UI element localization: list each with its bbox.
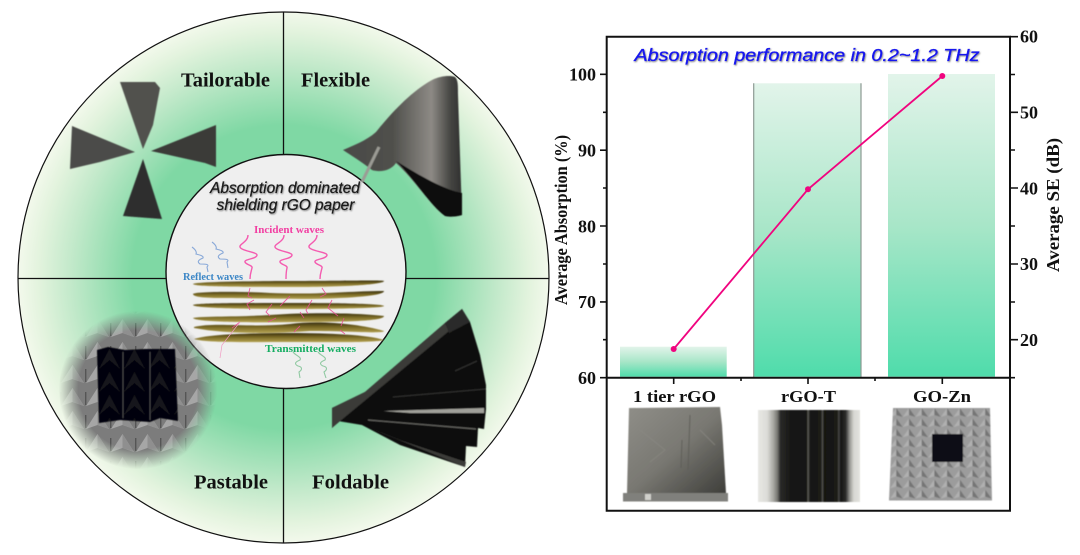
label: transmitted waves: Transmitted waves [265, 344, 356, 355]
right axis tick labels: 20 [1020, 330, 1038, 350]
right axis tick labels: 60 [1020, 26, 1038, 46]
label: incident waves: Incident waves [254, 225, 324, 236]
right axis tick labels: 50 [1020, 102, 1038, 122]
bar: rGO-T [754, 83, 861, 377]
heading: Pastable: Pastable [194, 472, 268, 494]
internal reflections inside layers [232, 288, 345, 334]
heading: Tailorable: Tailorable [181, 70, 270, 92]
icon: flexible curled paper [343, 76, 462, 217]
bar: GO-Zn [888, 74, 995, 377]
left axis tick labels: 100 [569, 64, 596, 84]
chart title: Absorption performance in 0.2~1.2 THz [633, 45, 980, 65]
left axis tick labels: 90 [578, 140, 596, 160]
left axis tick labels [569, 64, 596, 388]
photo: 1 tier rGO sheet [623, 407, 728, 502]
icon: tailored cross-shaped paper [70, 82, 216, 219]
outer circle [18, 12, 549, 543]
central title: shielding rGO paper [217, 197, 355, 214]
chart frame [607, 37, 1010, 511]
panel: absorption chart [551, 26, 1063, 511]
sample label: GO-Zn: GO-Zn [913, 387, 971, 406]
left axis tick labels: 70 [578, 292, 596, 312]
panel: property wheel [18, 12, 549, 543]
axis ticks [600, 37, 1018, 384]
left axis title: Average Absorption (%) [551, 135, 571, 305]
right axis tick labels: 30 [1020, 254, 1038, 274]
right axis tick labels: 40 [1020, 178, 1038, 198]
x axis line [607, 377, 1010, 379]
central title: Absorption dominated [209, 180, 360, 197]
panel: central absorption diagram [166, 154, 406, 388]
heading: Foldable: Foldable [312, 472, 389, 494]
bar: 1 tier rGO [620, 347, 727, 377]
icon: foldable fan paper [332, 309, 486, 467]
right axis title: Average SE (dB) [1043, 138, 1063, 272]
transmitted wave arrows [293, 352, 326, 378]
sample label: rGO-T: rGO-T [781, 387, 836, 406]
quadrant dividers [18, 12, 549, 543]
left axis tick labels: 80 [578, 216, 596, 236]
right axis tick labels [1020, 26, 1038, 350]
rGO layered paper [193, 281, 384, 342]
photo: GO-Zn pyramid absorber [889, 408, 992, 500]
reflect wave arrows [192, 242, 228, 272]
label: reflect waves: Reflect waves [183, 272, 243, 283]
incident wave arrows [240, 235, 327, 279]
left axis tick labels: 60 [578, 368, 596, 388]
inner circle [166, 154, 406, 388]
stray reflected ray [220, 322, 240, 358]
heading: Flexible: Flexible [301, 70, 370, 92]
icon: pasted paper on pyramid absorber [58, 310, 218, 470]
line series: average SE [671, 73, 945, 352]
central title [209, 180, 360, 214]
photo: rGO-T corrugated sheet [758, 410, 860, 502]
sample label: 1 tier rGO: 1 tier rGO [633, 387, 716, 406]
